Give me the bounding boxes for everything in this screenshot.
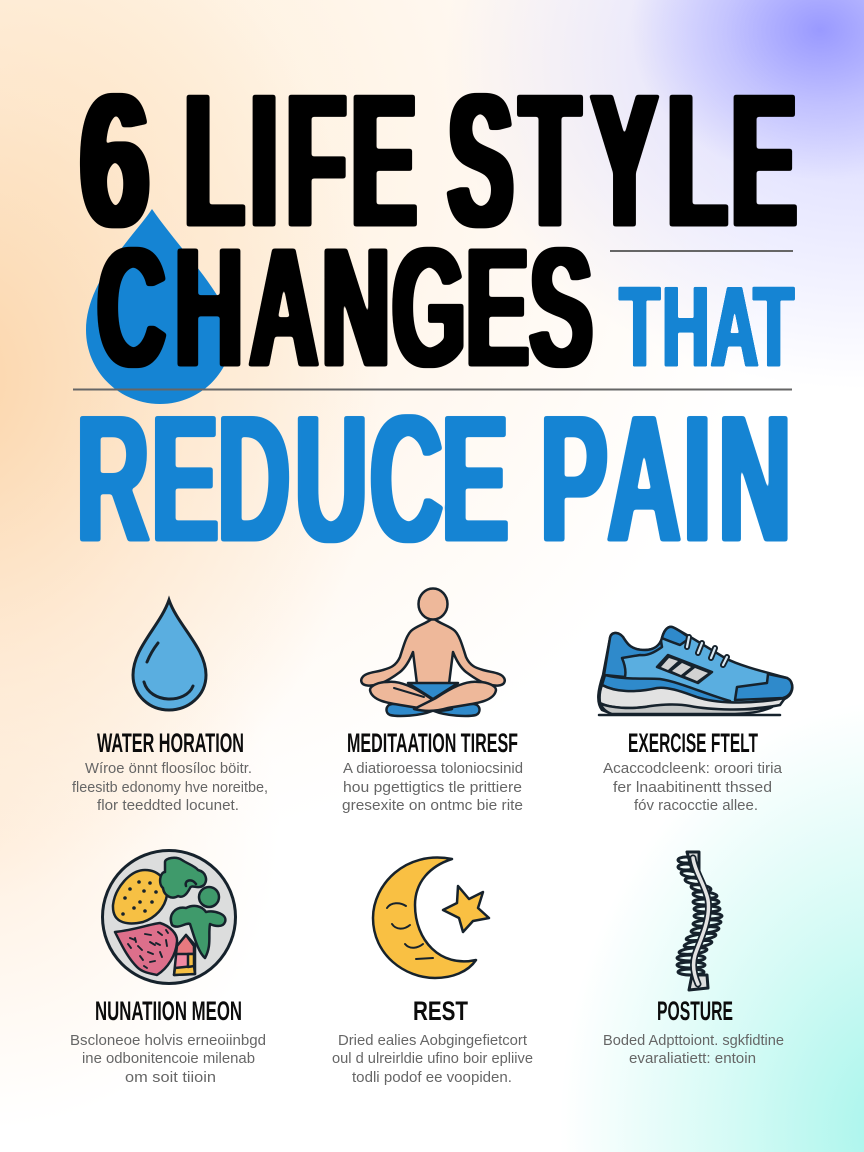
panel: exercise (598, 627, 792, 814)
icon: water drop (133, 600, 206, 710)
description: exercise: fóv racocctie allee. (634, 798, 758, 814)
description: nutrition (70, 1033, 266, 1086)
panel: rest (332, 858, 533, 1086)
description: meditation: hou pgettigtics tle prittiere (343, 780, 522, 796)
divider line: main (73, 388, 792, 390)
icon: crescent moon and star (373, 858, 489, 978)
description: rest (332, 1033, 533, 1086)
panel: meditation (342, 588, 523, 814)
panel: water hydration (72, 600, 268, 814)
title line: REDUCE PAIN: REDUCE PAIN (76, 378, 791, 580)
heading: posture: POSTURE (657, 996, 733, 1026)
description: rest: todli podof ee voopiden. (352, 1070, 512, 1086)
panel: nutrition (70, 850, 266, 1086)
description: rest: oul d ulreirldie ufino boir epliive (332, 1051, 533, 1067)
title line: CHANGES: CHANGES (97, 213, 593, 403)
description: nutrition: om soit tiioin (125, 1070, 216, 1086)
divider line: upper right (610, 250, 793, 252)
description: water: fleesitb edonomy hve noreitbe, (72, 780, 268, 796)
heading: nutrition: NUNATIION MEON (95, 996, 242, 1026)
description: rest: Dried ealies Aobgingefietcort (338, 1033, 527, 1049)
heading: water: WATER HORATION (97, 728, 244, 758)
description: exercise: Acaccodcleenk: oroori tiria (603, 761, 783, 777)
heading: rest: REST (413, 996, 468, 1026)
description: meditation: gresexite on ontmc bie rite (342, 798, 523, 814)
icon: large blue water drop behind title (86, 209, 232, 404)
description: water: Wíroe önnt floosíloc böitr. (85, 761, 252, 777)
description: exercise (603, 761, 783, 814)
description: exercise: fer lnaabitinentt thssed (613, 780, 772, 796)
icon: spine (677, 852, 722, 990)
heading: meditation: MEDITAATION TIRESF (347, 728, 518, 758)
title word: THAT: THAT (620, 263, 794, 391)
description: posture: Boded Adpttoiont. sgkfidtine (603, 1033, 784, 1049)
description: meditation (342, 761, 523, 814)
heading: exercise: EXERCISE FTELT (628, 728, 758, 758)
icon: meditating figure (361, 588, 505, 716)
description: meditation: A diatioroessa toloniocsinid (343, 761, 523, 777)
title line: 6 LIFE STYLE: 6 (80, 55, 150, 267)
description: posture: evaraliatiett: entoin (629, 1051, 756, 1067)
icon: food plate (102, 850, 236, 984)
icon: running shoe (598, 627, 792, 715)
description: nutrition: Bscloneoe holvis erneoiinbgd (70, 1033, 266, 1049)
panel: posture (603, 852, 784, 1067)
title line: 6 LIFE STYLE: LIFE STYLE (185, 53, 796, 266)
description: water: flor teeddted locunet. (97, 798, 239, 814)
title (76, 53, 796, 580)
description: nutrition: ine odbonitencoie milenab (82, 1051, 255, 1067)
description: posture (603, 1033, 784, 1067)
description: water (72, 761, 268, 814)
